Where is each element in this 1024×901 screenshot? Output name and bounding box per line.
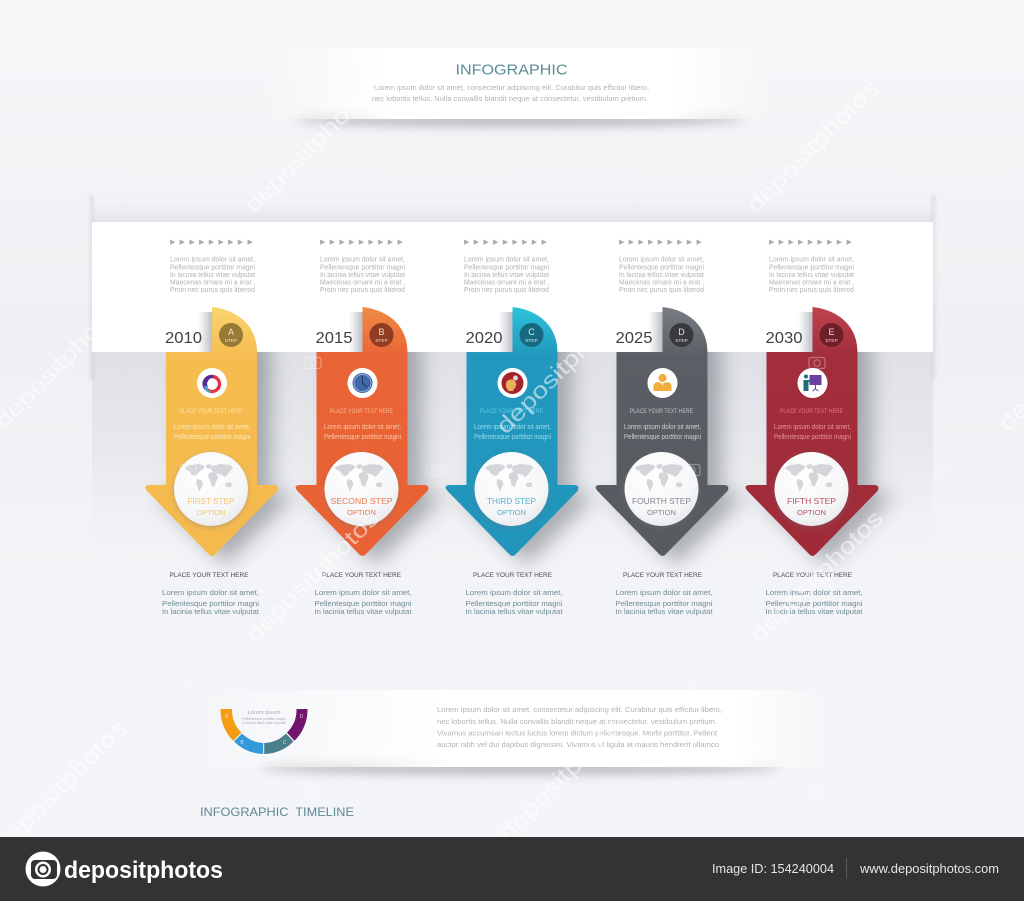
text block A: In lacinia tellus vitae vulputat [170, 270, 255, 279]
disc with world map [624, 452, 698, 528]
caption C: Pellentesque porttitor magni [466, 599, 563, 608]
arrow tick row C: ▶▶▶▶▶▶▶▶▶ [464, 239, 551, 246]
caption B: In lacinia tellus vitae vulputat [314, 607, 412, 616]
disc with world map [324, 452, 398, 528]
panel: header [262, 48, 772, 127]
year: 2020 [466, 330, 503, 347]
text block C: Pellentesque porttitor magni [464, 262, 549, 272]
header text: Lorem ipsum dolor sit amet, consectetur adipiscing elit. Curabitur quis efficitur libero, [374, 83, 649, 92]
step badge [520, 323, 544, 347]
title: INFOGRAPHIC [456, 62, 568, 78]
icon: person [648, 368, 678, 398]
text block A: Lorem ipsum dolor sit amet, [170, 254, 255, 264]
body text [324, 422, 401, 441]
step badge: B [378, 327, 385, 337]
watermark: depositphotos [745, 505, 888, 648]
icon: presenter at board [798, 368, 828, 398]
summary text [437, 705, 722, 749]
segment A [220, 709, 241, 741]
caption C: Lorem ipsum dolor sit amet, [466, 588, 562, 597]
header text: nec lobortis tellus. Nulla convallis blandit neque at consectetur. vestibulum pretium. [372, 94, 648, 103]
text block E: Maecenas ornare mi a erat , [769, 278, 854, 286]
segment letters: C [283, 740, 287, 746]
text block D [619, 254, 704, 294]
year: 2010 [165, 330, 202, 347]
body text [174, 422, 251, 441]
disc with world map [474, 452, 548, 528]
body text [474, 422, 551, 441]
text block C: In lacinia tellus vitae vulputat [464, 270, 549, 279]
caption D: Lorem ipsum dolor sit amet, [616, 588, 712, 597]
step badge: D [678, 327, 685, 337]
caption B: Pellentesque porttitor magni [314, 599, 412, 608]
caption E: In lacinia tellus vitae vulputat [766, 607, 863, 616]
arrow B [296, 307, 442, 564]
body text: Pellentesque porttitor magni [174, 432, 251, 441]
icon: donut [197, 368, 227, 398]
disc with world map: OPTION [797, 508, 826, 517]
caption E: PLACE YOUR TEXT HERE [773, 572, 852, 579]
text block D: Lorem ipsum dolor sit amet, [619, 254, 704, 264]
body text: Lorem ipsum dolor sit amet, [474, 422, 551, 431]
caption D: Pellentesque porttitor magni [616, 599, 713, 608]
step badge [219, 323, 243, 347]
text block E: In lacinia tellus vitae vulputat [769, 270, 854, 279]
arrow A [145, 307, 292, 564]
body text: Pellentesque porttitor magni [474, 432, 551, 441]
step badge [670, 323, 694, 347]
icon: camera logo [26, 852, 60, 886]
arrow tick row D: ▶▶▶▶▶▶▶▶▶ [619, 239, 706, 246]
heading: PLACE YOUR TEXT HERE [180, 408, 243, 415]
disc with world map [774, 452, 848, 528]
icon: head with gears [498, 368, 528, 398]
caption D [616, 572, 713, 616]
arrow D [596, 307, 742, 564]
caption E [766, 572, 863, 616]
year: 2015 [316, 330, 352, 347]
segment D [287, 709, 308, 741]
body text: Lorem ipsum dolor sit amet, [774, 422, 851, 431]
segment B [234, 734, 263, 754]
header text [372, 83, 649, 103]
text block C: Maecenas ornare mi a erat , [464, 278, 549, 286]
caption B [314, 572, 412, 616]
caption A [162, 572, 260, 616]
caption E: Pellentesque porttitor magni [766, 599, 863, 608]
brand name: depositphotos [64, 857, 223, 884]
segment letters: A [225, 714, 229, 720]
timeline column B [296, 239, 442, 616]
disc with world map: FOURTH STEP [632, 497, 691, 506]
panel: timeline band [90, 192, 935, 562]
panel: bottom summary [190, 690, 830, 775]
watermark: depositphotos [241, 505, 384, 648]
text block D: Maecenas ornare mi a erat , [619, 278, 704, 286]
segment letters [225, 714, 304, 746]
segment C [264, 734, 294, 754]
text block B: In lacinia tellus vitae vulputat [320, 270, 405, 279]
watermark: depositphotos [741, 75, 884, 218]
timeline column C [446, 239, 592, 616]
image id: Image ID: 154240004 [712, 862, 834, 876]
heading: PLACE YOUR TEXT HERE [630, 408, 693, 415]
text block D: Pellentesque porttitor magni [619, 262, 704, 272]
icon: clock [348, 368, 378, 398]
chart caption: In lacinia tellus vitae vulputat [242, 721, 286, 725]
heading: PLACE YOUR TEXT HERE [780, 408, 843, 415]
arrow tick row B: ▶▶▶▶▶▶▶▶▶ [320, 239, 407, 246]
step badge [820, 323, 844, 347]
text block C: Lorem ipsum dolor sit amet, [464, 254, 549, 264]
timeline column E [746, 239, 892, 616]
text block C [464, 254, 549, 294]
text block C: Proin nec purus quis liberod [464, 285, 549, 294]
arrow C [446, 307, 592, 564]
chart caption: Pellentesque porttitor magni [242, 717, 286, 721]
body text: Lorem ipsum dolor sit amet, [174, 422, 250, 431]
disc with world map: OPTION [196, 508, 226, 517]
body text [624, 422, 701, 441]
step badge [370, 323, 394, 347]
text block E: Lorem ipsum dolor sit amet, [769, 254, 854, 264]
chart: semicircle legend [220, 709, 308, 754]
year: 2025 [616, 330, 652, 347]
step badge: STEP [525, 338, 538, 344]
body text: Pellentesque porttitor magni [324, 432, 401, 441]
watermark: depositphotos [493, 703, 636, 846]
summary text: Lorem ipsum dolor sit amet, consectetur adipiscing elit. Curabitur quis efficitur libero, [437, 705, 722, 714]
text block E: Proin nec purus quis liberod [769, 285, 854, 294]
text block E [769, 254, 854, 294]
timeline footer title: INFOGRAPHIC TIMELINE [200, 805, 354, 819]
caption C: PLACE YOUR TEXT HERE [473, 572, 552, 579]
text block A: Pellentesque porttitor magni [170, 262, 255, 272]
segment letters: D [300, 714, 304, 720]
chart caption [242, 710, 286, 725]
text block B [320, 254, 405, 294]
text block A: Proin nec purus quis liberod [170, 285, 255, 294]
step badge: STEP [825, 338, 838, 344]
heading: PLACE YOUR TEXT HERE [480, 408, 543, 415]
step badge: C [528, 327, 535, 337]
step badge: E [828, 327, 835, 337]
timeline column A [145, 239, 292, 616]
caption B: Lorem ipsum dolor sit amet, [314, 588, 412, 597]
text block E: Pellentesque porttitor magni [769, 262, 854, 272]
disc with world map: OPTION [347, 508, 376, 517]
caption D: In lacinia tellus vitae vulputat [616, 607, 713, 616]
body text: Pellentesque porttitor magni [774, 432, 851, 441]
step badge: STEP [225, 338, 237, 344]
segment letters: B [240, 740, 244, 746]
text block A [170, 254, 255, 294]
summary text: nec lobortis tellus. Nulla convallis blandit neque at consectetur. vestibulum pretium. [437, 717, 717, 726]
text block D: Proin nec purus quis liberod [619, 285, 704, 294]
disc with world map: SECOND STEP [330, 497, 392, 506]
arrow tick row A: ▶▶▶▶▶▶▶▶▶ [170, 239, 257, 246]
body text: Lorem ipsum dolor sit amet, [324, 422, 401, 431]
watermark: depositphotos [239, 75, 382, 218]
heading: PLACE YOUR TEXT HERE [330, 408, 393, 415]
text block A: Maecenas ornare mi a erat , [170, 278, 255, 286]
footer bar [0, 837, 1024, 901]
year: 2030 [766, 330, 803, 347]
summary text: Vivamus accumsan lectus luctus lorem dictum pellentesque. Morbi porttitor. Pellent [437, 728, 717, 738]
watermark: depositphotos [491, 296, 634, 439]
body text: Lorem ipsum dolor sit amet, [624, 422, 701, 431]
body text [774, 422, 851, 441]
text block D: In lacinia tellus vitae vulputat [619, 270, 704, 279]
arrow E [746, 307, 892, 564]
text block B: Proin nec purus quis liberod [320, 285, 405, 294]
body text: Pellentesque porttitor magni [624, 432, 701, 441]
caption D: PLACE YOUR TEXT HERE [623, 572, 702, 579]
disc with world map: THIRD STEP [487, 497, 536, 506]
caption C: In lacinia tellus vitae vulputat [466, 607, 563, 616]
disc with world map: FIRST STEP [188, 497, 234, 506]
caption A: PLACE YOUR TEXT HERE [170, 572, 249, 579]
step badge: STEP [675, 338, 688, 344]
step badge: A [228, 327, 234, 337]
caption C [466, 572, 563, 616]
arrow tick row E: ▶▶▶▶▶▶▶▶▶ [769, 239, 856, 246]
caption A: Lorem ipsum dolor sit amet, [162, 588, 259, 597]
chart caption: Lorem ipsum [248, 710, 281, 716]
disc with world map: OPTION [647, 508, 676, 517]
timeline column D [596, 239, 742, 616]
caption B: PLACE YOUR TEXT HERE [322, 572, 401, 579]
caption A: In lacinia tellus vitae vulputat [162, 607, 260, 616]
caption E: Lorem ipsum dolor sit amet, [766, 588, 862, 597]
caption A: Pellentesque porttitor magni [162, 599, 259, 608]
step badge: STEP [375, 338, 388, 344]
text block B: Lorem ipsum dolor sit amet, [320, 254, 405, 264]
website: www.depositphotos.com [859, 862, 999, 876]
disc with world map [174, 452, 248, 528]
disc with world map: OPTION [497, 508, 526, 517]
summary text: auctor nibh vel dui dapibus dignissim. Vivamus ut ligula at mauris hendrerit ullamco [437, 740, 719, 749]
disc with world map: FIFTH STEP [787, 497, 836, 506]
text block B: Maecenas ornare mi a erat , [320, 278, 405, 286]
text block B: Pellentesque porttitor magni [320, 262, 405, 272]
